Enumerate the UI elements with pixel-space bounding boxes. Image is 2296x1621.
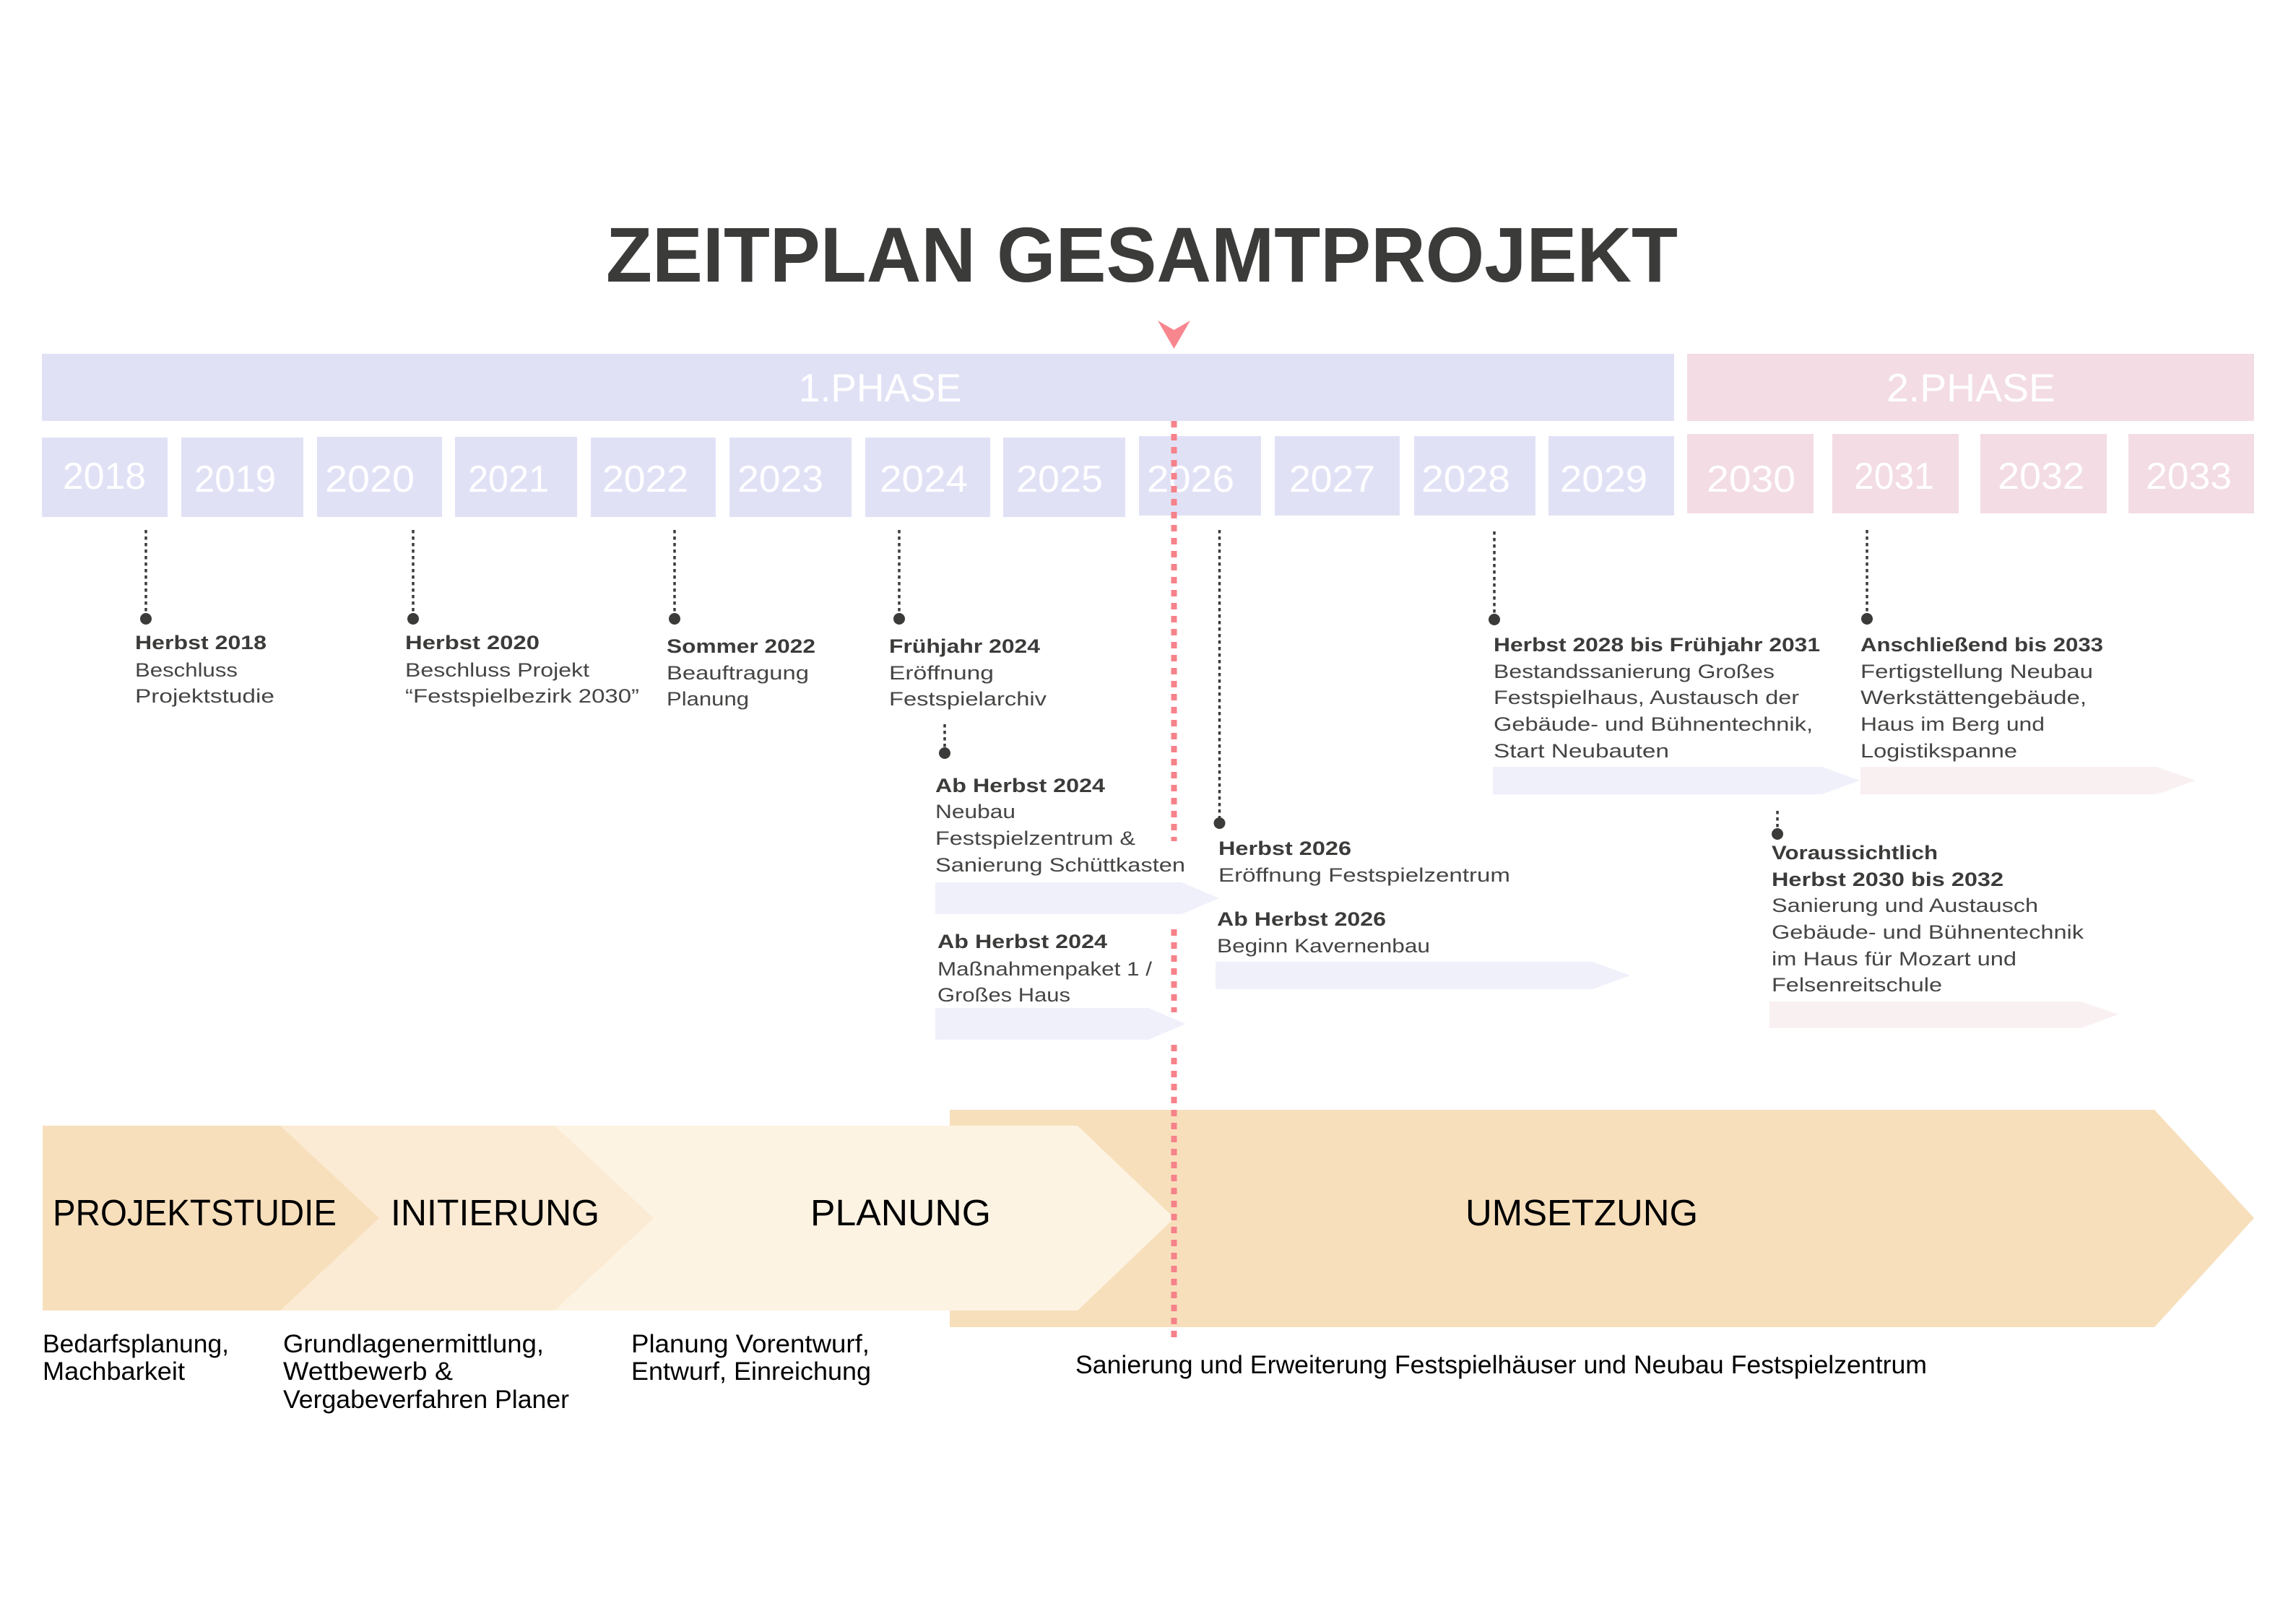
text: Ab Herbst 2024 Neubau: Festspielzentrum & xyxy=(935,827,1135,849)
year 2026 xyxy=(1139,436,1261,516)
connector: Herbst 2028 xyxy=(1489,531,1500,625)
text: Herbst 2028 bis Frühjahr 2031: Start Neubauten xyxy=(1494,740,1669,762)
year 2025: 2025 xyxy=(1016,459,1103,500)
text: Sommer 2022: Sommer 2022 xyxy=(667,635,815,657)
text: Projektstudie description: Bedarfsplanung, xyxy=(43,1330,229,1358)
year 2030: 2030 xyxy=(1707,459,1795,500)
text: Planung description: Entwurf, Einreichung xyxy=(631,1357,871,1386)
year 2026: 2026 xyxy=(1147,459,1234,500)
connector: Herbst 2026 xyxy=(1213,530,1225,829)
year 2023 xyxy=(729,438,852,517)
text: Anschließend bis 2033: Fertigstellung Neubau xyxy=(1860,661,2093,682)
text: Herbst 2026 xyxy=(1218,838,1510,886)
text: Herbst 2020: Beschluss Projekt xyxy=(405,659,590,681)
arrow: Neubau Festspielzentrum xyxy=(935,882,1219,914)
year 2021: 2021 xyxy=(468,459,549,500)
year 2028: 2028 xyxy=(1421,459,1510,500)
text: Herbst 2018: Herbst 2018 xyxy=(135,632,267,653)
arrow: Maßnahmenpaket 1 xyxy=(935,1008,1186,1040)
text: Ab Herbst 2024 Maßnahmenpaket: Großes Haus xyxy=(937,984,1070,1006)
text: Voraussichtlich Herbst 2030 bis 2032 xyxy=(1772,842,2084,996)
text: Herbst 2026: Eröffnung Festspielzentrum xyxy=(1218,864,1510,886)
panel: phase 1 banner xyxy=(42,354,1674,421)
title: ZEITPLAN GESAMTPROJEKT xyxy=(606,211,1678,298)
today line: upper segment xyxy=(1171,421,1177,841)
text: Ab Herbst 2026: Ab Herbst 2026 xyxy=(1217,908,1386,930)
panel: phase 2 banner xyxy=(1687,354,2254,421)
text: Herbst 2018: Projektstudie xyxy=(135,685,274,707)
text: Projektstudie description: Machbarkeit xyxy=(43,1357,185,1386)
year 2027: 2027 xyxy=(1289,459,1375,500)
label: Umsetzung: UMSETZUNG xyxy=(1465,1192,1698,1233)
year 2022 xyxy=(591,438,716,517)
text: Anschließend bis 2033: Haus im Berg und xyxy=(1860,713,2045,735)
panel: phase 1 banner: 1.PHASE xyxy=(799,365,961,410)
text: Herbst 2028 bis Frühjahr 2031: Festspielhaus, Austausch der xyxy=(1494,687,1799,708)
text: Herbst 2018 xyxy=(135,632,274,707)
text: Planung description xyxy=(631,1330,871,1386)
year 2020: 2020 xyxy=(325,459,415,500)
text: Sommer 2022 xyxy=(667,635,815,710)
text: Herbst 2028 bis Frühjahr 2031: Gebäude- und Bühnentechnik, xyxy=(1494,713,1813,735)
chevron: Umsetzung xyxy=(950,1110,2254,1327)
year 2024: 2024 xyxy=(880,459,968,500)
arrow: Beginn Kavernenbau xyxy=(1216,962,1630,989)
text: Ab Herbst 2024 Maßnahmenpaket: Ab Herbst 2024 xyxy=(937,931,1107,952)
text: Herbst 2028 bis Frühjahr 2031: Herbst 2028 bis Frühjahr 2031 xyxy=(1494,634,1820,656)
text: Ab Herbst 2024 Maßnahmenpaket: Maßnahmenpaket 1 / xyxy=(937,958,1153,980)
text: Herbst 2026: Herbst 2026 xyxy=(1218,838,1351,859)
label: Projektstudie: PROJEKTSTUDIE xyxy=(53,1192,337,1233)
text: Herbst 2020: “Festspielbezirk 2030” xyxy=(405,685,639,707)
connector: Sommer 2022 xyxy=(669,530,680,625)
text: Sommer 2022: Planung xyxy=(667,688,749,710)
arrow: Fertigstellung Neubau xyxy=(1860,767,2196,794)
text: Ab Herbst 2024 Neubau: Ab Herbst 2024 xyxy=(935,775,1105,796)
year 2029 xyxy=(1548,436,1674,516)
year 2029: 2029 xyxy=(1560,459,1647,500)
year 2031 xyxy=(1832,434,1959,513)
today line: lower segment xyxy=(1171,1045,1177,1337)
year 2028 xyxy=(1414,436,1535,516)
year 2030 xyxy=(1687,434,1814,513)
text: Voraussichtlich Herbst 2030 bis 2032: Herbst 2030 bis 2032 xyxy=(1772,869,2003,890)
text: Herbst 2028 bis Frühjahr 2031: Bestandssanierung Großes xyxy=(1494,661,1775,682)
text: Ab Herbst 2024 Neubau: Neubau xyxy=(935,801,1015,822)
year 2024 xyxy=(865,438,990,517)
text: Ab Herbst 2024 Neubau xyxy=(935,775,1185,876)
year 2032 xyxy=(1980,434,2107,513)
panel: year cells phase 2 xyxy=(1687,434,2254,513)
chevron: Initiierung xyxy=(144,1126,654,1311)
connector: Frühjahr 2024 xyxy=(893,530,905,625)
text: Anschließend bis 2033: Werkstättengebäude, xyxy=(1860,687,2087,708)
text: Planung description: Planung Vorentwurf, xyxy=(631,1330,870,1358)
text: Voraussichtlich Herbst 2030 bis 2032: Felsenreitschule xyxy=(1772,974,1942,996)
year 2031: 2031 xyxy=(1854,456,1934,497)
year 2018: 2018 xyxy=(63,456,146,497)
arrow: Bestandssanierung xyxy=(1493,767,1860,794)
text: Herbst 2028 bis Frühjahr 2031 xyxy=(1494,634,1820,762)
today line: middle segment xyxy=(1171,929,1177,1012)
connector: Voraussichtlich xyxy=(1772,811,1783,840)
text: Frühjahr 2024 xyxy=(889,635,1047,710)
text: Voraussichtlich Herbst 2030 bis 2032: Gebäude- und Bühnentechnik xyxy=(1772,921,2084,943)
text: Frühjahr 2024: Eröffnung xyxy=(889,662,994,684)
text: Ab Herbst 2026 xyxy=(1217,908,1430,957)
year 2020 xyxy=(317,437,442,517)
text: Anschließend bis 2033: Anschließend bis 2033 xyxy=(1860,634,2103,656)
text: Frühjahr 2024: Festspielarchiv xyxy=(889,688,1047,710)
label: Planung: PLANUNG xyxy=(810,1192,991,1233)
text: Herbst 2020 xyxy=(405,632,639,707)
connector: Anschließend bis 2033 xyxy=(1861,530,1873,625)
text: Initiierung description: Wettbewerb & xyxy=(283,1357,453,1386)
year 2018 xyxy=(42,438,168,517)
year 2027 xyxy=(1275,436,1400,516)
year 2033 xyxy=(2128,434,2254,513)
year 2023: 2023 xyxy=(737,459,823,500)
text: Anschließend bis 2033: Logistikspanne xyxy=(1860,740,2017,762)
icon: today marker arrow xyxy=(1158,321,1190,349)
text: Ab Herbst 2026: Beginn Kavernenbau xyxy=(1217,935,1430,957)
year 2019: 2019 xyxy=(194,459,276,500)
text: Projektstudie description xyxy=(43,1330,229,1386)
text: Anschließend bis 2033 xyxy=(1860,634,2103,762)
text: Umsetzung description: Sanierung und Erweiterung Festspielhäuser und Neubau Festspielzentrum xyxy=(1075,1351,1927,1379)
panel: year cells phase 1 xyxy=(42,436,1674,517)
year 2032: 2032 xyxy=(1998,456,2084,497)
arrow: Sanierung Haus für Mozart xyxy=(1769,1001,2118,1028)
year 2022: 2022 xyxy=(602,459,688,500)
text: Initiierung description: Vergabeverfahren Planer xyxy=(283,1386,569,1414)
year 2033: 2033 xyxy=(2146,456,2232,497)
text: Ab Herbst 2024 Neubau: Sanierung Schüttkasten xyxy=(935,854,1185,876)
text: Frühjahr 2024: Frühjahr 2024 xyxy=(889,635,1040,657)
chevron: Projektstudie xyxy=(43,1126,379,1311)
text: Voraussichtlich Herbst 2030 bis 2032: Voraussichtlich xyxy=(1772,842,1938,864)
connector: Herbst 2020 xyxy=(407,530,419,625)
text: Herbst 2020: Herbst 2020 xyxy=(405,632,540,653)
text: Herbst 2018: Beschluss xyxy=(135,659,238,681)
text: Voraussichtlich Herbst 2030 bis 2032: Sanierung und Austausch xyxy=(1772,895,2038,916)
connector: Ab Herbst 2024 Neubau xyxy=(939,724,950,759)
year 2025 xyxy=(1003,438,1125,517)
text: Voraussichtlich Herbst 2030 bis 2032: im Haus für Mozart und xyxy=(1772,948,2016,970)
text: Sommer 2022: Beauftragung xyxy=(667,662,809,684)
year 2019 xyxy=(181,438,303,517)
panel: phase 2 banner: 2.PHASE xyxy=(1886,365,2055,410)
year 2021 xyxy=(455,437,577,517)
chevron: Planung xyxy=(280,1126,1174,1311)
text: Ab Herbst 2024 Maßnahmenpaket xyxy=(937,931,1153,1006)
text: Initiierung description xyxy=(283,1330,569,1414)
label: Initierung: INITIERUNG xyxy=(391,1192,599,1233)
connector: Herbst 2018 xyxy=(140,530,152,625)
text: Initiierung description: Grundlagenermittlung, xyxy=(283,1330,544,1358)
